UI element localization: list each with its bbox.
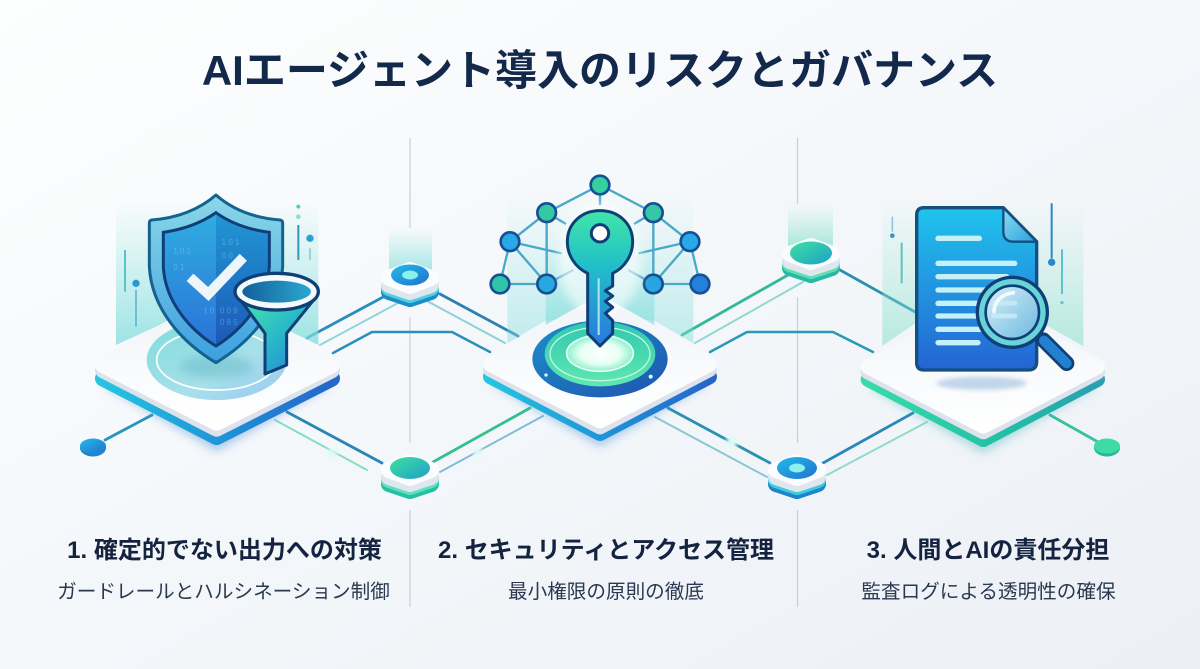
icon: shield: 0 1 (173, 263, 185, 272)
icon: key (567, 211, 633, 346)
text block: section 2 (438, 537, 774, 603)
document shadow (937, 377, 1027, 390)
platform disc (532, 321, 668, 397)
text block: section 3 (861, 537, 1116, 603)
column dividers (410, 138, 798, 607)
connector lines (105, 270, 1098, 477)
panel: document and magnifier illustration (868, 200, 1097, 453)
icon: shield: 0 8 5 (220, 318, 238, 327)
junction node: top right (788, 204, 833, 275)
backdrop glow (507, 190, 693, 343)
text block: section 3: 3. 人間とAIの責任分担 (867, 537, 1109, 564)
icon: shield: 1 0 1 (173, 246, 192, 255)
accent marks (125, 205, 314, 327)
junction node: top left (389, 228, 432, 299)
text block: section 1: ガードレールとハルシネーション制御 (57, 581, 390, 603)
icon: shield: 1 0 (203, 306, 215, 315)
text block: section 1 (57, 537, 390, 603)
icon: funnel (235, 273, 318, 374)
icon: document (917, 208, 1037, 370)
end node: right (1094, 438, 1120, 456)
text block: section 2: 2. セキュリティとアクセス管理 (438, 537, 774, 564)
sparks on lines (327, 436, 738, 458)
text block: section 1: 1. 確定的でない出力への対策 (67, 537, 382, 564)
icon: shield (149, 195, 283, 363)
panel: key and network illustration (491, 176, 709, 447)
junction node: bottom left (389, 457, 431, 491)
text block: section 2: 最小権限の原則の徹底 (508, 581, 704, 603)
backdrop glow (116, 202, 318, 345)
icon: shield: 0 0 (222, 251, 233, 260)
network (491, 176, 709, 293)
icon: shield: 1 0 1 (222, 238, 240, 247)
platform (491, 303, 709, 447)
panel: shield and funnel illustration (103, 195, 332, 452)
backdrop glow (882, 200, 1083, 346)
title: AIエージェント導入のリスクとガバナンス (202, 47, 998, 94)
key glow (558, 203, 642, 317)
text block: section 3: 監査ログによる透明性の確保 (861, 581, 1116, 603)
icon: magnifier (976, 276, 1067, 363)
platform disc (147, 320, 287, 400)
accent marks (890, 203, 1064, 304)
junction node: bottom right (776, 457, 818, 491)
platform (868, 303, 1097, 453)
end node: left (80, 438, 106, 456)
icon: shield: 0 0 9 (220, 306, 238, 315)
platform (103, 303, 332, 452)
